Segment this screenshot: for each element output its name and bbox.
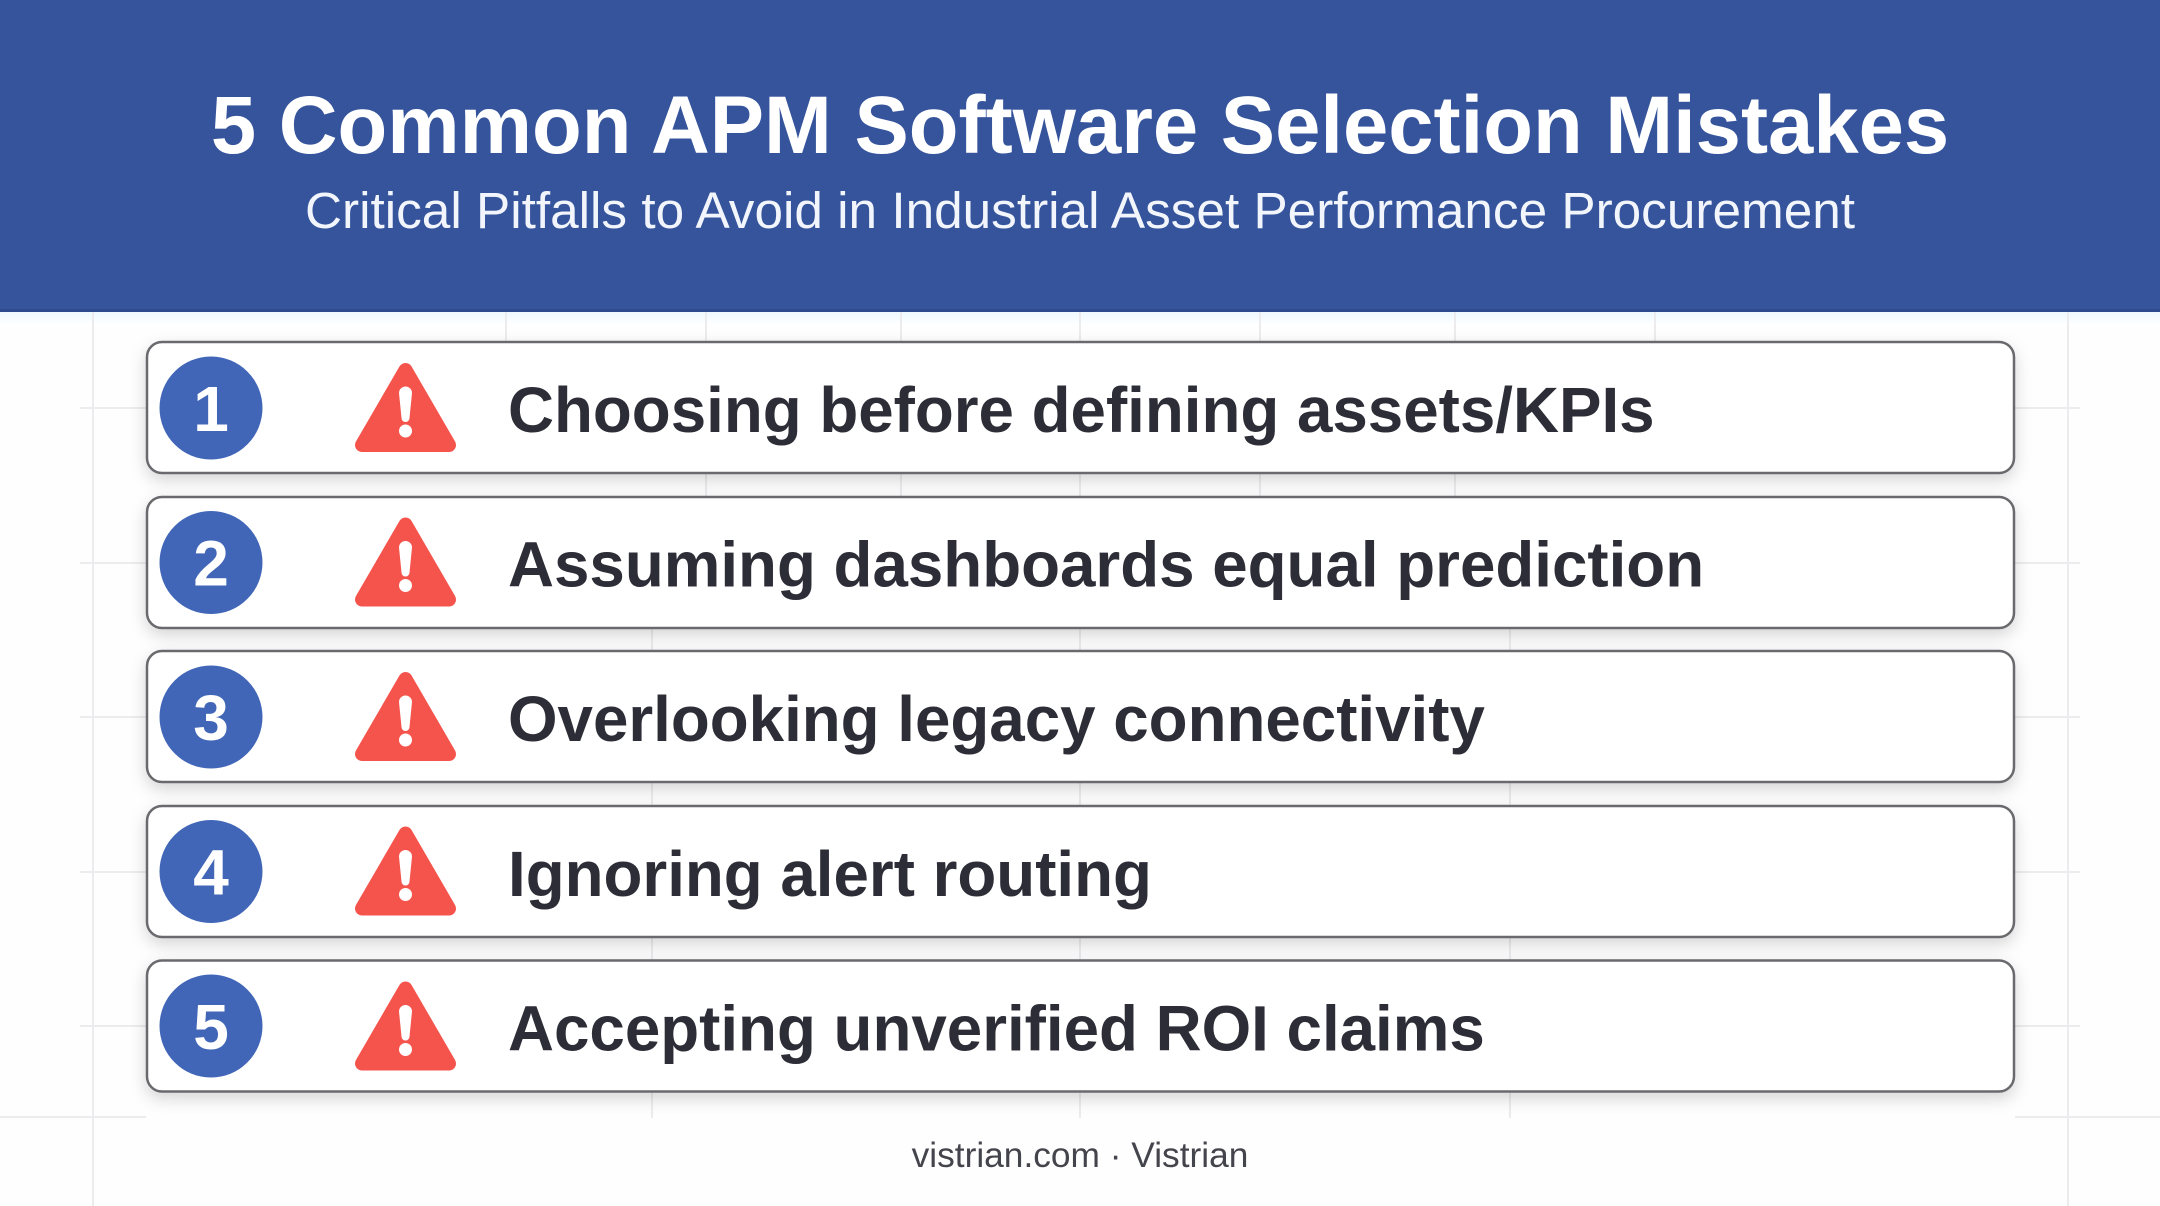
number badge 1: 1: [193, 373, 229, 445]
title: 5 Common APM Software Selection Mistakes: [211, 80, 1949, 171]
number badge 3: [160, 666, 262, 768]
text: mistake 3: Overlooking legacy connectivity: [508, 684, 1485, 755]
header banner: [0, 0, 2160, 312]
text: mistake 2: Assuming dashboards equal prediction: [508, 530, 1704, 600]
text: mistake 4: Ignoring alert routing: [508, 839, 1152, 910]
icon: warning triangle: [362, 988, 449, 1064]
icon: warning triangle: [362, 679, 449, 754]
text: mistake 5: Accepting unverified ROI claims: [508, 994, 1485, 1064]
panel: mistake 1: [147, 342, 2014, 473]
subtitle: Critical Pitfalls to Avoid in Industrial Asset Performance Procurement: [305, 182, 1855, 239]
text: mistake 1: Choosing before defining assets/KPIs: [508, 375, 1655, 446]
number badge 1: [160, 356, 262, 460]
number badge 4: [160, 820, 262, 923]
panel: mistake 3: [147, 651, 2014, 782]
panel: mistake 4: [147, 806, 2014, 937]
icon: warning triangle: [362, 524, 449, 600]
number badge 2: 2: [193, 528, 229, 600]
icon: warning triangle: [362, 370, 449, 445]
number badge 3: 3: [193, 682, 229, 754]
panel: mistake 2: [147, 497, 2014, 628]
footer: vistrian.com · Vistrian: [912, 1136, 1248, 1175]
number badge 5: 5: [193, 991, 229, 1063]
number badge 5: [160, 974, 262, 1078]
number badge 2: [160, 511, 262, 614]
icon: warning triangle: [362, 834, 449, 908]
panel: mistake 5: [147, 960, 2014, 1092]
number badge 4: 4: [193, 836, 229, 908]
